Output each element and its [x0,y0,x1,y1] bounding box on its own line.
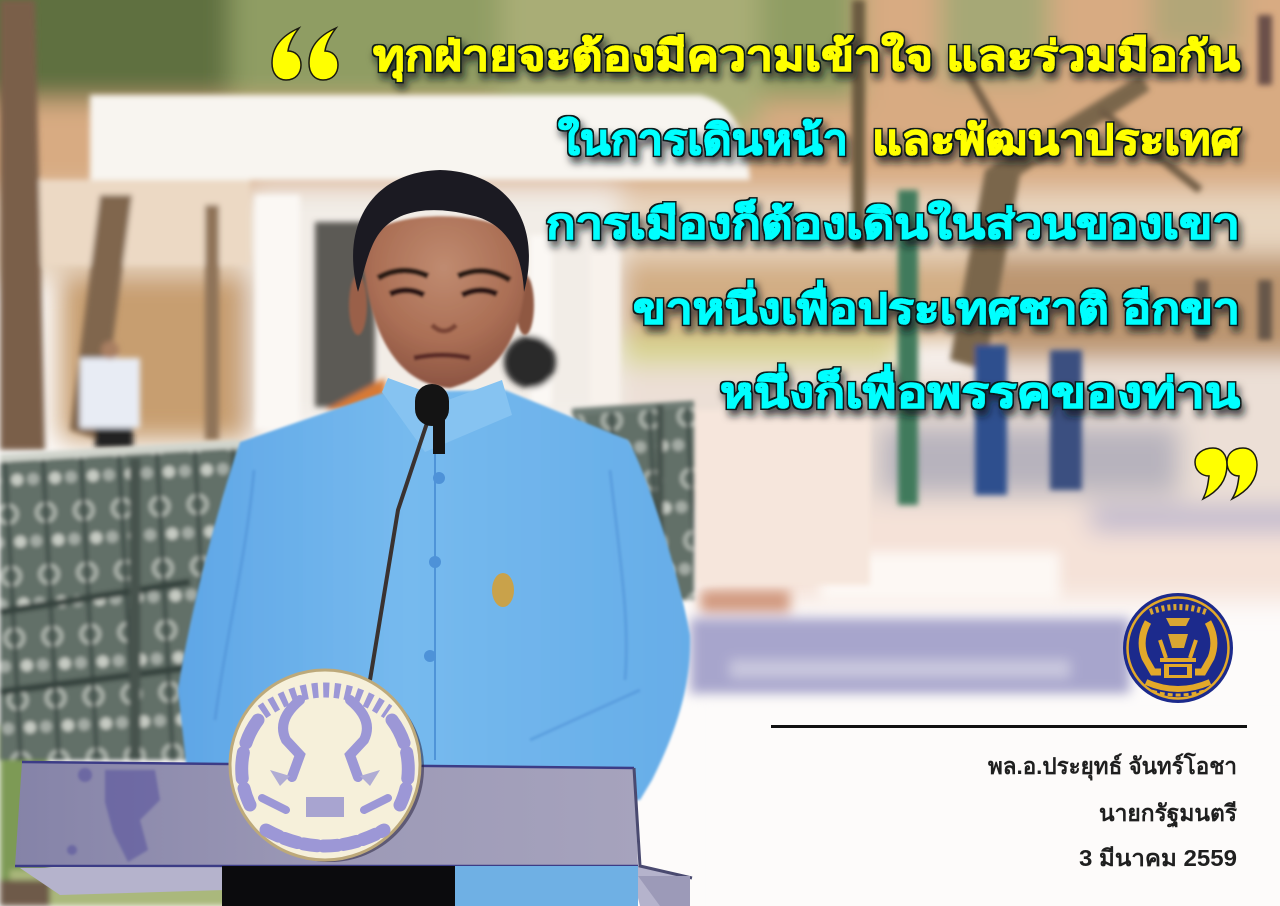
speaker attribution: นายกรัฐมนตรี [1099,800,1238,828]
icon: closing quote mark [1195,448,1257,499]
jacket [178,390,690,800]
person: prime minister in blue jacket [178,170,690,800]
line 3: การเมืองก็ต้องเดินในส่วนของเขา [546,199,1240,247]
hair [353,170,529,292]
neck and collar [382,378,512,452]
microphone [370,420,428,680]
line 2 cyan: ในการเดินหน้า [558,116,848,163]
speaker attribution: พล.อ.ประยุทธ์ จันทร์โอชา [988,752,1237,781]
line 1: ทุกฝ่ายจะต้องมีความเข้าใจ และร่วมมือกัน [373,32,1240,82]
speaker attribution [988,752,1238,871]
icon: government seal [1123,593,1233,703]
buttons and pin [424,472,445,662]
podium [15,762,692,906]
line 4: ขาหนึ่งเพื่อประเทศชาติ อีกขา [633,280,1240,332]
divider line [771,725,1247,728]
podium seal [230,670,424,862]
line 2 yellow: และพัฒนาประเทศ [872,117,1241,163]
fence [0,404,694,760]
line 5: หนึ่งก็เพื่อพรรคของท่าน [720,364,1240,416]
quotation text [373,32,1241,416]
face [349,216,534,388]
speaker attribution: 3 มีนาคม 2559 [1079,845,1237,871]
icon: opening quote mark [272,28,338,80]
